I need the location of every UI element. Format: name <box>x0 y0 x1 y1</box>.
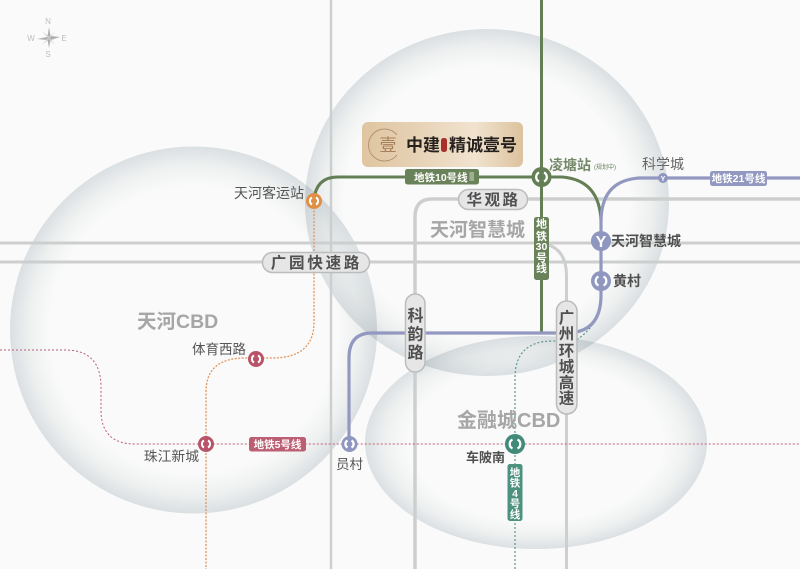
label: 地铁10号线: 地铁10号线 <box>414 171 468 184</box>
station: 凌塘站 <box>532 157 616 187</box>
compass: E <box>61 34 67 43</box>
logo card <box>362 122 523 167</box>
label: 地铁4号线: 号 <box>510 498 520 510</box>
label: 地铁4号线: 线 <box>510 508 521 521</box>
road label: 广园快速路: 广园快速路 <box>271 253 362 272</box>
road label: 广州环城高速: 州 <box>559 326 574 343</box>
logo card: 精诚壹号 <box>449 135 517 155</box>
station: 凌塘站: (规划中) <box>594 163 616 171</box>
station: 科学城 <box>642 156 684 183</box>
sphere: 金融城CBD <box>365 336 707 549</box>
label: 地铁21号线: 地铁21号线 <box>712 172 766 185</box>
label: 地铁4号线: 铁 <box>510 476 521 490</box>
compass: W <box>27 34 35 43</box>
area title: 天河智慧城: 天河智慧城 <box>430 219 525 241</box>
road label: 科韵路: 路 <box>407 343 424 362</box>
station: 员村: 员村 <box>336 457 363 472</box>
label: 地铁30号线: 线 <box>536 261 547 275</box>
label: 地铁4号线 <box>508 464 522 521</box>
sphere: 天河智慧城 <box>305 29 669 376</box>
station: 体育西路: 体育西路 <box>192 342 246 357</box>
road label: 广州环城高速: 广 <box>559 309 574 327</box>
logo card: 中建 <box>406 136 440 155</box>
road label: 科韵路 <box>406 294 425 372</box>
station: 天河客运站 <box>234 185 322 209</box>
label: 地铁30号线: 铁 <box>536 229 547 243</box>
metro line 21 <box>349 178 800 444</box>
compass <box>27 17 67 59</box>
label: 地铁5号线 <box>249 437 306 452</box>
sphere: 天河CBD <box>10 146 377 514</box>
station: 珠江新城: 珠江新城 <box>144 449 199 464</box>
station: 黄村 <box>591 271 641 291</box>
station: 员村 <box>336 436 363 472</box>
station: 天河智慧城 <box>591 231 681 251</box>
station: 天河智慧城: 天河智慧城 <box>611 233 681 249</box>
road label: 华观路 <box>458 190 528 210</box>
station: 珠江新城 <box>144 436 214 464</box>
station: 车陂南: 车陂南 <box>466 450 505 465</box>
station: 天河智慧城: Y <box>596 234 607 251</box>
metro line 10 <box>314 177 601 222</box>
label: 地铁5号线: 地铁5号线 <box>254 438 302 451</box>
road label: 广州环城高速: 高 <box>559 373 574 392</box>
area title: 天河CBD: 天河CBD <box>137 311 218 333</box>
compass: S <box>45 50 51 59</box>
label: 地铁4号线: 4 <box>512 488 518 500</box>
label: 地铁30号线: 地 <box>536 216 547 230</box>
label: 地铁30号线: 30 <box>536 241 547 253</box>
station: 科学城: Y <box>661 176 666 183</box>
metro line 3 <box>206 200 314 569</box>
label: 地铁4号线: 地 <box>510 466 521 479</box>
road label: 广州环城高速: 城 <box>559 357 575 376</box>
metro line 30 <box>540 0 543 333</box>
road label: 科韵路: 科 <box>407 307 424 325</box>
compass: N <box>45 17 51 26</box>
label: 地铁30号线: 号 <box>536 252 547 264</box>
station: 天河客运站: 天河客运站 <box>234 185 304 201</box>
road label: 科韵路: 韵 <box>407 324 424 344</box>
road label: 华观路: 华观路 <box>466 190 521 209</box>
station: 体育西路 <box>192 342 264 367</box>
road label: 广州环城高速: 速 <box>559 390 575 408</box>
metro line 5 <box>0 350 800 444</box>
station: 车陂南 <box>466 434 525 465</box>
station: 凌塘站: 凌塘站 <box>549 157 591 173</box>
logo card: 壹 <box>380 136 396 155</box>
station: 科学城: 科学城 <box>642 156 684 172</box>
metro line 4 <box>515 298 601 569</box>
road label: 广州环城高速: 环 <box>559 343 574 360</box>
label: 地铁30号线 <box>534 216 549 280</box>
label: 地铁10号线 <box>405 169 479 184</box>
area title: 金融城CBD: 金融城CBD <box>457 408 560 432</box>
road label: 广州环城高速 <box>556 301 577 414</box>
station: 黄村: 黄村 <box>613 273 641 289</box>
